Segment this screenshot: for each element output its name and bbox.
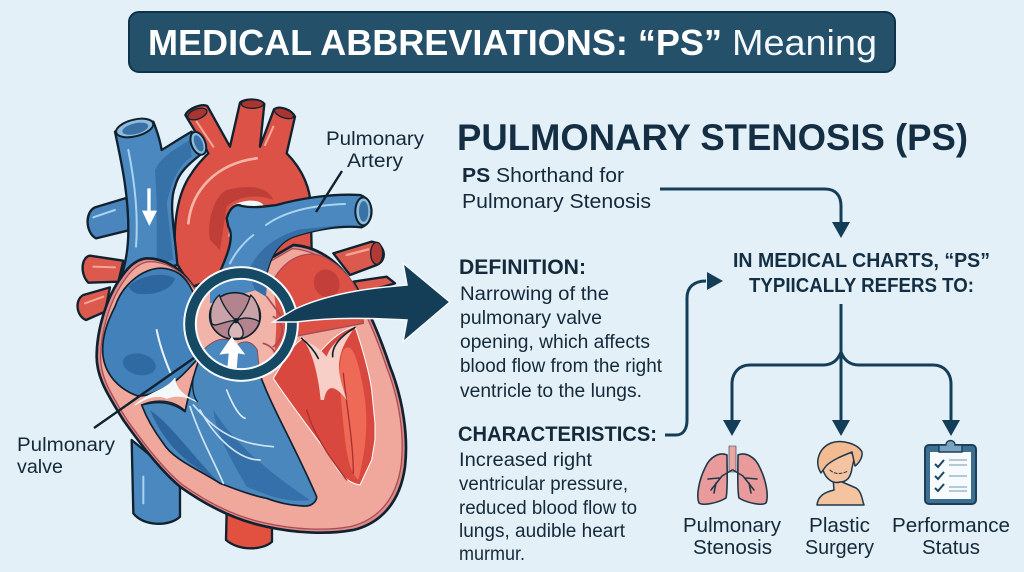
characteristics block [458,423,657,565]
characteristics block: Increased right [459,450,593,471]
blue left vein [88,197,130,238]
label: pulmonary stenosis [683,515,781,559]
left atrium [273,254,363,337]
white valve cords [135,378,197,405]
characteristics block: CHARACTERISTICS: [458,423,657,446]
charts heading: TYPIICALLY REFERS TO: [749,275,974,297]
aortic arch [175,100,312,290]
magnified pulmonary valve [190,267,292,377]
definition block: ventricle to the lungs. [460,381,642,402]
definition block: DEFINITION: [459,256,586,279]
main heading: PULMONARY STENOSIS (PS) [457,117,968,158]
white flow arrow [219,337,245,369]
label: performance status: Status [922,537,980,559]
flow arrow in vena cava [142,188,157,226]
icon: plastic surgery face [817,442,864,505]
label: performance status: Performance [892,515,1010,537]
icon: lungs [698,446,767,504]
label: pulmonary stenosis: Stenosis [693,537,772,559]
characteristics block: ventricular pressure, [459,474,628,495]
label: pulmonary valve: valve [17,457,63,478]
label: pulmonary valve: Pulmonary [17,435,116,456]
title banner: MEDICAL ABBREVIATIONS: “PS” [148,22,722,63]
label: plastic surgery: Surgery [805,537,874,559]
red pulmonary veins [78,242,395,320]
label: pulmonary stenosis: Pulmonary [683,515,781,537]
descending aorta stump [226,510,272,548]
label: performance status [892,515,1010,559]
title banner [129,12,895,72]
pulmonary artery [220,195,371,290]
right ventricle [135,353,317,506]
branching arrows [723,304,960,436]
shorthand text: Pulmonary Stenosis [462,191,651,213]
characteristics block: lungs, audible heart [459,521,626,542]
label: pulmonary artery: Pulmonary [326,129,425,150]
label: plastic surgery [805,515,874,559]
heart body [97,245,406,533]
label: pulmonary artery [316,129,425,212]
definition block [459,256,663,402]
label: pulmonary artery: Artery [347,151,404,172]
heart illustration [78,100,406,548]
definition block: opening, which affects [460,332,650,353]
icon: clipboard checklist [925,440,976,504]
title banner: Meaning [732,22,877,63]
shorthand text: PS Shorthand for [462,165,624,187]
definition block: Narrowing of the [460,284,609,305]
definition block: blood flow from the right [460,356,663,377]
arrow: shorthand to charts heading [660,189,850,238]
arrow: characteristics to charts heading [665,272,723,435]
characteristics block: murmur. [459,544,525,565]
characteristics block: reduced blood flow to [459,498,637,519]
shorthand text [462,165,651,213]
superior vena cava [114,115,209,280]
definition block: pulmonary valve [460,308,602,329]
charts heading: IN MEDICAL CHARTS, “PS” [733,250,990,272]
large arrow from valve to text [273,263,450,342]
label: pulmonary valve [17,358,194,478]
right atrium [103,268,200,396]
inferior vena cava [132,440,180,524]
left ventricle [273,327,375,485]
magnifier ring [190,273,292,375]
charts heading [733,250,990,297]
label: plastic surgery: Plastic [809,515,870,537]
